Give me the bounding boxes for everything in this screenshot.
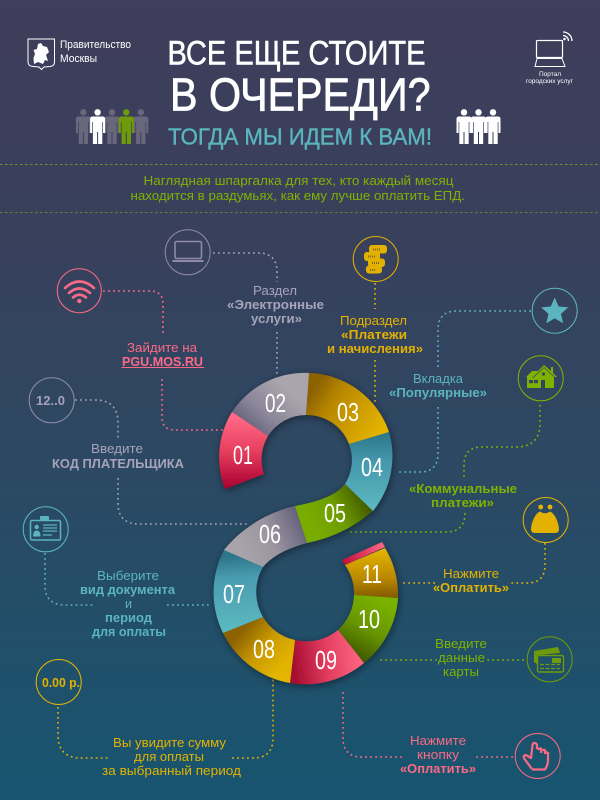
ribbon segment 06 [224, 506, 307, 567]
ribbon segment 01 [219, 412, 268, 489]
icon: laptop [165, 230, 210, 275]
label: step 8: за выбранный период [102, 763, 241, 778]
label: step 7: и [125, 596, 132, 611]
step 10 connector [379, 659, 524, 661]
label: step 4 [389, 371, 487, 400]
icon: star [532, 288, 577, 333]
step numbers: 05 [324, 498, 346, 528]
icon: house [518, 356, 563, 401]
icon: amount 0.00 р.: 0.00 р. [42, 675, 80, 690]
people: queue left [76, 109, 148, 144]
label: step 9: кнопку [417, 747, 460, 762]
label: step 1: Зайдите на [127, 340, 198, 355]
label: step 2: «Электронные [227, 297, 324, 312]
ribbon segment 09 [290, 630, 364, 684]
label: step 7: вид документа [80, 582, 176, 597]
ribbon segment 03 [306, 373, 389, 444]
step 9 connector [343, 690, 513, 757]
label: step 6: Введите [91, 441, 143, 456]
step 8 connector [58, 678, 273, 758]
S-shaped ribbon [214, 373, 398, 684]
label: step 2: Раздел [253, 283, 297, 298]
label: step 11: «Оплатить» [433, 580, 509, 595]
label: step 9: Нажмите [410, 733, 466, 748]
label: step 11 [433, 566, 509, 595]
label: step 2 [227, 283, 324, 326]
step numbers [223, 388, 383, 675]
label: step 8: для оплаты [134, 749, 204, 764]
icon: coins [353, 236, 398, 282]
ribbon segment 10 [338, 595, 398, 663]
icon: pointing hand [515, 734, 560, 778]
step numbers: 04 [361, 452, 383, 482]
intro text: Наглядная шпаргалка для тех, кто каждый месяц [144, 173, 454, 188]
label: step 9 [400, 733, 476, 776]
step numbers: 02 [265, 388, 286, 418]
icon: code 12..0 [29, 378, 74, 423]
step numbers: 08 [253, 634, 275, 664]
ribbon segment 04 [345, 432, 392, 511]
step 6 connector [75, 400, 247, 524]
step 7 connector [45, 553, 210, 605]
title [168, 34, 430, 121]
step numbers: 01 [233, 440, 253, 470]
label: step 2: услуги» [251, 311, 302, 326]
label: step 3: «Платежи [341, 327, 407, 342]
label: step 6 [52, 441, 185, 471]
portal logo [526, 32, 574, 85]
label: step 7: для оплаты [92, 624, 166, 639]
label: step 7: Выберите [97, 568, 159, 583]
label: step 10 [435, 636, 487, 679]
label: step 8 [102, 735, 241, 778]
step 3 connector [374, 283, 376, 402]
label: step 5: платежи» [431, 495, 494, 510]
ribbon segment 02 [232, 373, 309, 436]
label: step 7 [80, 568, 176, 639]
label: step 3: и начисления» [327, 341, 423, 356]
label: step 9: «Оплатить» [400, 761, 476, 776]
label: step 1 [122, 340, 204, 369]
label: step 4: Вкладка [413, 371, 464, 386]
label: step 7: период [105, 610, 153, 625]
intro text: находится в раздумьях, как ему лучше оплатить ЕПД. [130, 188, 465, 203]
people: queue right [456, 109, 500, 144]
ribbon segment 08 [223, 617, 295, 683]
step 5 connector [350, 405, 540, 532]
icon: bank card [527, 637, 572, 682]
label: step 5 [409, 481, 517, 510]
icon: wifi [57, 269, 101, 313]
step numbers: 10 [358, 604, 380, 634]
portal logo: Портал [539, 72, 562, 78]
title: В ОЧЕРЕДИ? [170, 69, 430, 121]
step numbers: 11 [362, 559, 382, 589]
ribbon segment 11 [345, 548, 398, 598]
icon: code 12..0: 12..0 [36, 393, 65, 408]
subtitle: Тогда мы идем к вам: ТОГДА МЫ ИДЕМ К ВАМ! [168, 124, 432, 150]
label: step 4: «Популярные» [389, 385, 487, 400]
label: step 3: Подраздел [340, 313, 407, 328]
step numbers: 09 [315, 645, 337, 675]
logo: Правительство Москвы: Правительство [60, 39, 131, 51]
label: step 6: КОД ПЛАТЕЛЬЩИКА [52, 456, 185, 471]
step 11 connector [402, 543, 545, 583]
step 1 connector [103, 291, 223, 430]
logo: Правительство Москвы [28, 39, 131, 70]
label: step 8: Вы увидите сумму [113, 735, 227, 750]
icon: purse [523, 498, 568, 542]
step 2 connector [213, 253, 277, 375]
step numbers: 06 [259, 519, 281, 549]
ribbon segment 05 [295, 484, 373, 543]
logo: Правительство Москвы: Москвы [60, 53, 97, 65]
label: step 11: Нажмите [443, 566, 499, 581]
label: step 10: данные [438, 650, 485, 665]
title: ВСЕ ЕЩЕ СТОИТЕ [168, 34, 426, 72]
ribbon strip 11 [342, 542, 385, 565]
step numbers: 03 [337, 397, 359, 427]
step numbers: 07 [223, 579, 245, 609]
icon: ID document [23, 507, 68, 552]
icon: amount 0.00 р. [36, 660, 81, 704]
label: step 10: Введите [435, 636, 487, 651]
intro text [130, 173, 465, 203]
label: step 3 [327, 313, 423, 356]
portal logo: городских услуг [526, 79, 574, 85]
label: step 1: PGU.MOS.RU [122, 354, 203, 369]
ribbon segment 07 [214, 550, 263, 633]
step 4 connector [398, 311, 531, 472]
label: step 5: «Коммунальные [409, 481, 517, 496]
label: step 10: карты [443, 664, 479, 679]
